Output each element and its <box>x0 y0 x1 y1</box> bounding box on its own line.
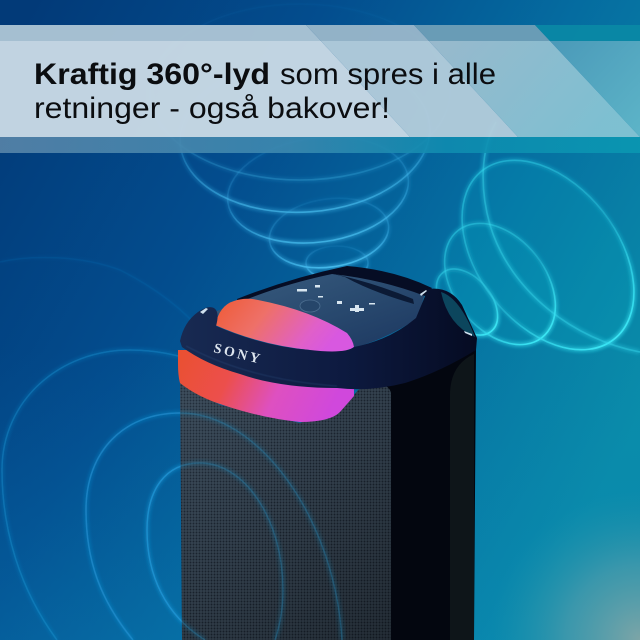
headline: Kraftig 360°-lyd <box>34 58 270 91</box>
banner band: second segment <box>306 25 429 41</box>
touch controls <box>297 285 375 312</box>
corner highlights <box>200 290 472 336</box>
SONY logo: SONY <box>212 341 261 367</box>
banner band: left segment <box>0 25 321 41</box>
top slot <box>330 273 414 304</box>
right corner glass <box>441 292 475 337</box>
banner band: right segment <box>535 25 640 41</box>
headline: som spres i alle <box>280 58 496 91</box>
speaker side body <box>340 335 476 640</box>
speaker <box>178 266 477 640</box>
upper light ring <box>215 299 354 351</box>
sound wave: large right arc <box>483 122 640 352</box>
sound waves: right of speaker <box>422 128 640 382</box>
banner band: third segment <box>414 25 550 41</box>
ring highlight <box>186 346 337 386</box>
speaker grille <box>180 383 391 640</box>
power button <box>300 300 320 312</box>
wave light on grille <box>180 410 345 640</box>
top rear rim <box>237 266 432 303</box>
banner <box>0 25 640 153</box>
banner band: bottom strip <box>0 137 640 153</box>
handle ring <box>180 289 477 389</box>
sound waves: above speaker <box>150 4 450 280</box>
headline line 2: retninger - også bakover! <box>34 92 390 125</box>
sound waves: left of speaker <box>0 257 260 640</box>
side panel shade <box>450 354 474 640</box>
lower light ring <box>178 350 354 422</box>
top surface <box>210 272 425 348</box>
